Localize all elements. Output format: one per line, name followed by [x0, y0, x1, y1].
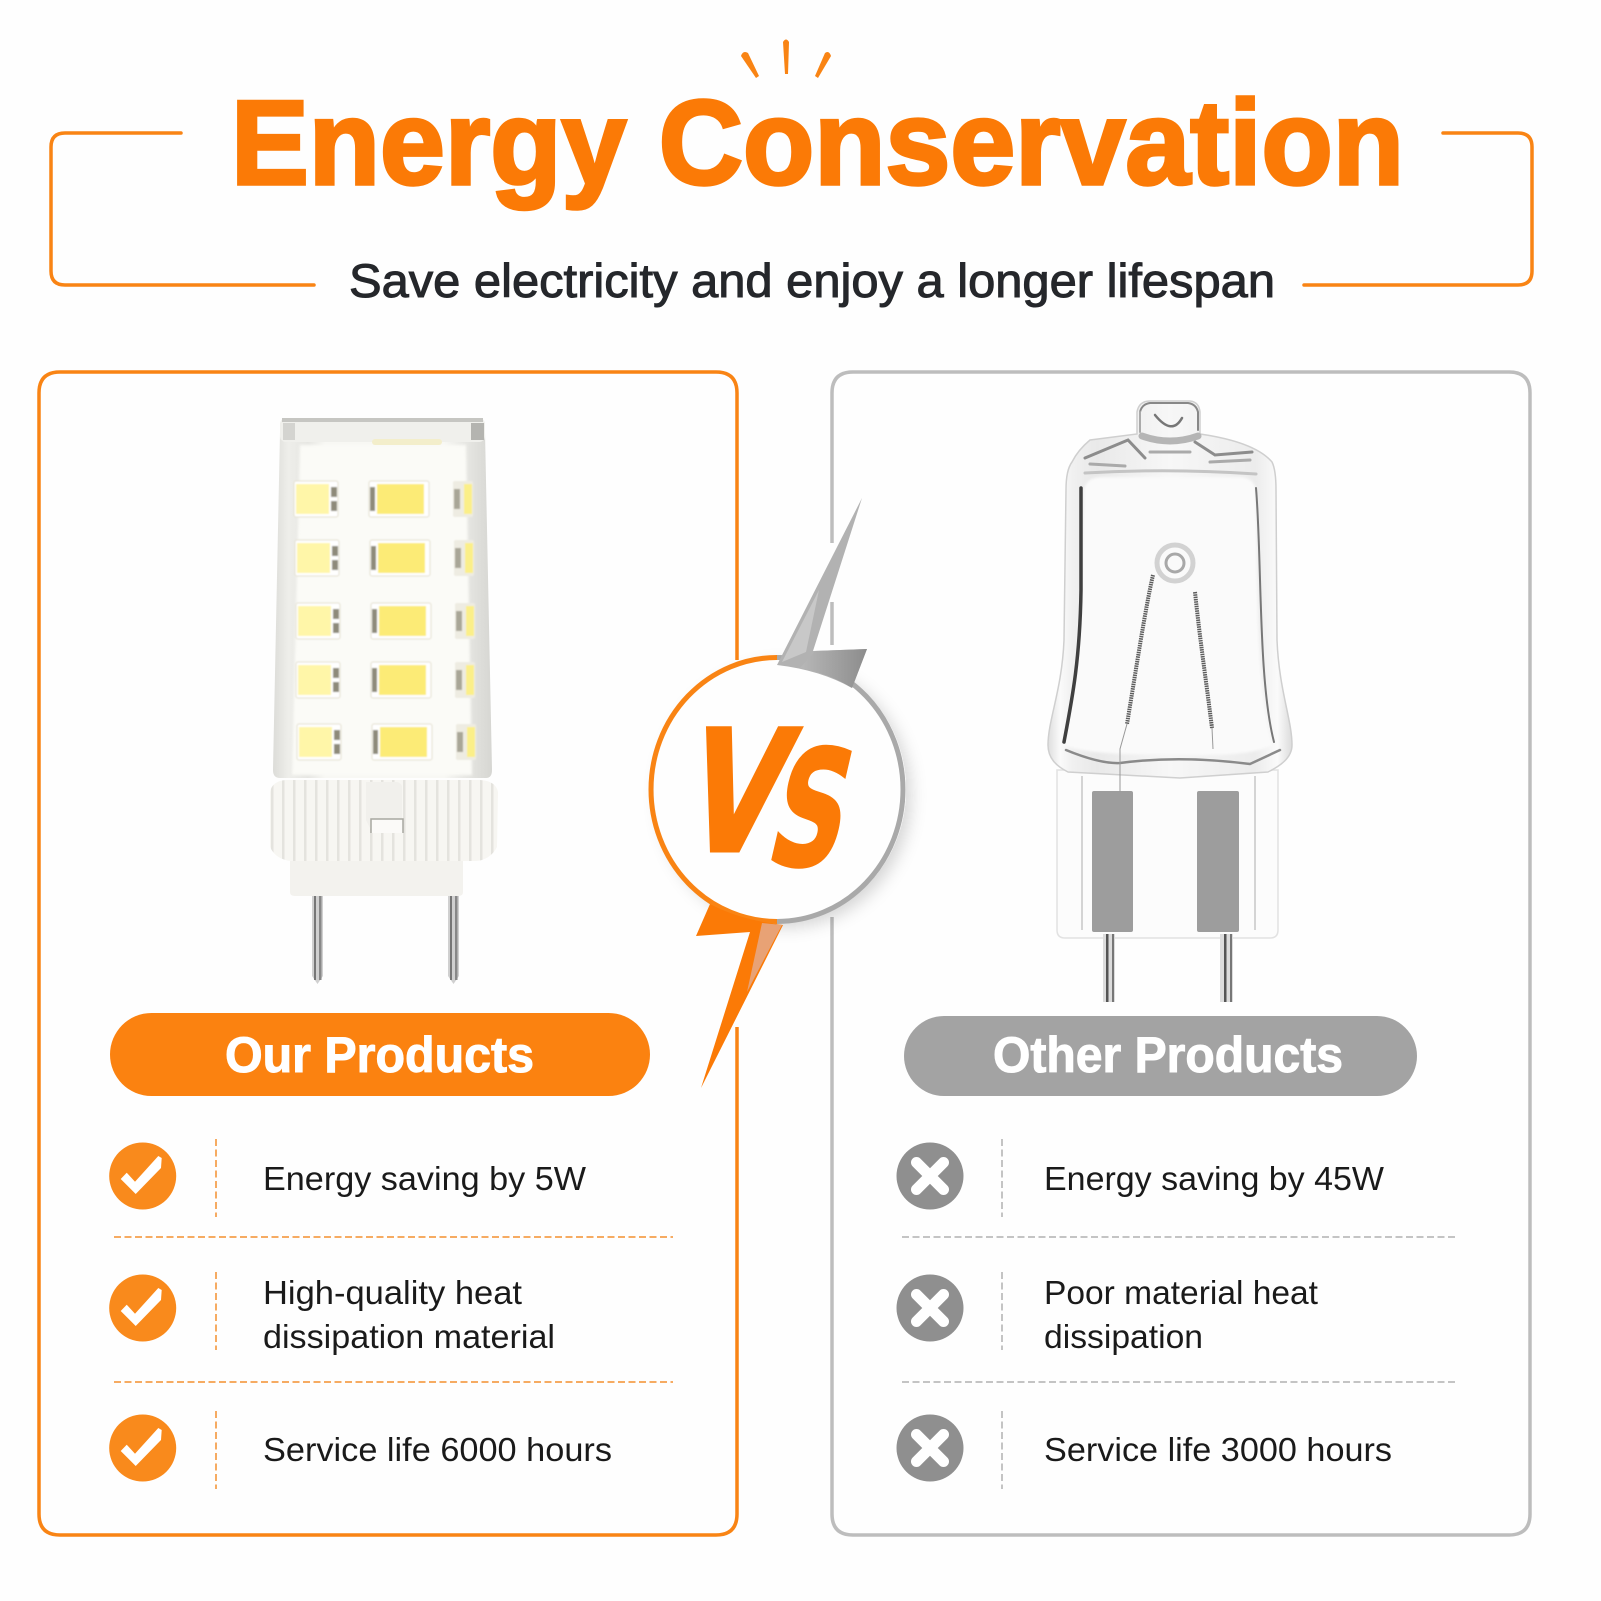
halogen gray blocks [1092, 791, 1239, 932]
title: Energy Conservation [231, 76, 1404, 210]
feature text: heat dissipation: High-quality heat [263, 1274, 522, 1311]
icon: cross [896, 1414, 964, 1482]
feature text: heat dissipation: dissipation material [263, 1318, 555, 1355]
header bracket frame [51, 133, 1532, 285]
badge orange arc [651, 658, 777, 922]
LED bulb top lip [280, 418, 485, 445]
feature text: service life: Service life 6000 hours [263, 1431, 612, 1468]
feature text: energy saving: Energy saving by 45W [1044, 1160, 1385, 1197]
panel: other products frame [832, 372, 1530, 1535]
icon: cross [896, 1142, 964, 1210]
icon: spark rays above title [741, 40, 831, 78]
label: other products [904, 1016, 1417, 1096]
badge circle [654, 658, 906, 922]
icon: check [109, 1414, 176, 1482]
LED corn bulb illustration [270, 418, 498, 984]
VS letters: S [754, 718, 871, 903]
VS letters: V [667, 695, 810, 891]
row dividers [114, 1139, 673, 1489]
halogen filament [1120, 545, 1213, 792]
feature text: service life: Service life 3000 hours [1044, 1431, 1392, 1468]
gray lightning bolt [777, 498, 867, 688]
row dividers [902, 1139, 1456, 1489]
halogen glass envelope [1048, 401, 1292, 778]
label: our products [110, 1013, 650, 1096]
LED bulb ribbed base [270, 780, 498, 861]
LED bulb clear body [273, 432, 492, 778]
halogen pins [1103, 934, 1233, 1002]
list: our products features [109, 1139, 673, 1489]
LED bulb plug [290, 861, 463, 896]
feature text: heat dissipation [1044, 1274, 1318, 1355]
subtitle: Save electricity and enjoy a longer lifespan [349, 254, 1275, 307]
halogen bulb illustration [1048, 401, 1292, 1002]
feature text: heat dissipation: dissipation [1044, 1318, 1203, 1355]
feature text: heat dissipation [263, 1274, 555, 1355]
panel: our products frame [39, 372, 737, 1535]
label: our products: Our Products [225, 1027, 534, 1083]
halogen block inner edges [1082, 776, 1255, 930]
halogen glass inner edges [1064, 403, 1280, 764]
icon: cross [896, 1274, 964, 1342]
badge gray arc [777, 658, 903, 922]
label: other products: Other Products [993, 1027, 1343, 1083]
list: other products features [896, 1139, 1456, 1489]
icon: check [109, 1274, 176, 1342]
LED bulb pins [312, 896, 459, 984]
orange lightning bolt [696, 904, 783, 1088]
icon: check [109, 1142, 176, 1210]
VS badge [651, 498, 906, 1088]
halogen inner cavity [1064, 477, 1272, 755]
feature text: energy saving: Energy saving by 5W [263, 1160, 587, 1197]
halogen lower clear block [1057, 770, 1278, 938]
feature text: heat dissipation: Poor material heat [1044, 1274, 1318, 1311]
LED chip rows [294, 481, 476, 760]
